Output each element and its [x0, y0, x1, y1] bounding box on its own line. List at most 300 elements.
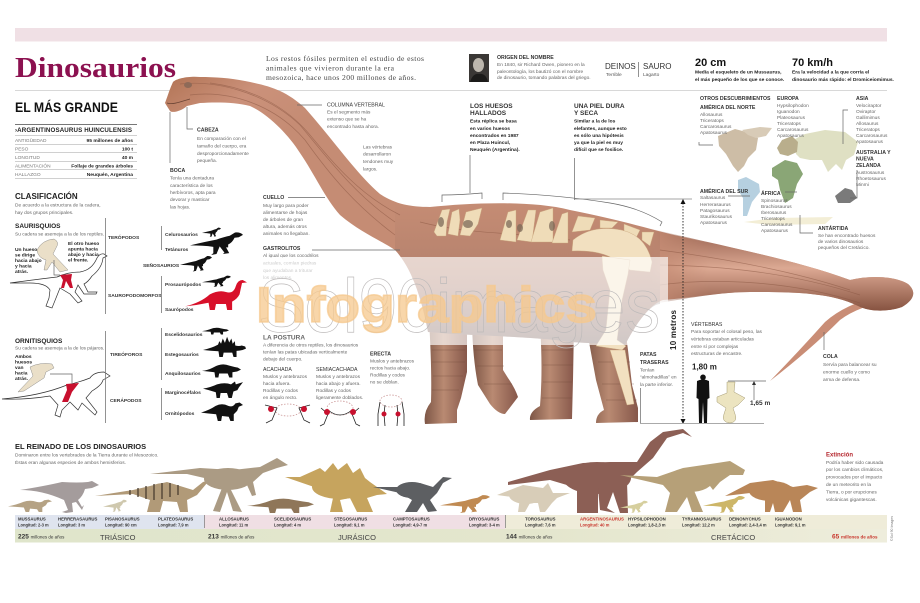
- mouth: [167, 99, 190, 104]
- classification heading: hay dos grupos principales.: [15, 210, 73, 216]
- plateosaurus stripes: [130, 483, 178, 500]
- timeline species strip: Longitud: 9,1 m: [775, 522, 806, 528]
- cabeza note: pequeña.: [197, 158, 217, 164]
- timeline species strip: Longitud: 7,9 m: [158, 522, 189, 528]
- eye: [184, 82, 192, 88]
- skeleton: hip and leg bones: [572, 228, 652, 405]
- cuello note: animales no llegaban.: [263, 231, 310, 237]
- saurischian groups: TERÓPODOS: [108, 233, 140, 241]
- dino: Hypsilophodon: [620, 501, 648, 513]
- tail shading: [640, 226, 913, 311]
- los huesos hallados: Neuquén (Argentina).: [470, 147, 520, 153]
- dino: Iguanodon: [725, 480, 818, 512]
- stat: 70 km/h: dinosaurio más rápido: el Dromiceiomimus.: [792, 77, 895, 83]
- tendons note: Las vértebras: [363, 144, 393, 150]
- dino: Mussaurus: [8, 500, 52, 512]
- patas traseras note: PATAS: [640, 352, 657, 358]
- map: other discoveries: Carcarosaurus: [700, 124, 732, 130]
- boca note: característica de los: [170, 183, 213, 189]
- table: Argentinosaurus data: 100 t: [122, 146, 133, 152]
- map: other discoveries: Iguanodon: [777, 109, 800, 115]
- table: Argentinosaurus data: Neuquén, Argentina: [87, 172, 133, 178]
- columna vertebral note: COLUMNA VERTEBRAL: [327, 102, 385, 108]
- map: other discoveries: Rhoetosaurus: [856, 176, 886, 182]
- saurischian pelvis notes: apunta hacia: [68, 246, 98, 252]
- una piel dura y seca: ya que la piel es muy: [574, 140, 623, 146]
- timeline species strip: Longitud: 2-3 m: [18, 522, 49, 528]
- map: other discoveries: ÁFRICA: [761, 190, 781, 197]
- table: Argentinosaurus data: 40 m: [122, 155, 134, 161]
- timeline species strip: MUSSAURUS: [18, 516, 46, 522]
- ornithischian dino diagram: [2, 363, 110, 417]
- vertebras note: estructuras de encastre.: [691, 351, 742, 357]
- table: Argentinosaurus data: [15, 124, 137, 179]
- intro text: Los restos fósiles permiten el estudio de estos: [266, 54, 424, 63]
- map: other discoveries: Saltasaurus: [700, 195, 726, 201]
- ornithischian groups: CERÁPODOS: [110, 397, 142, 404]
- map: other discoveries: OTROS DESCUBRIMIENTOS: [700, 96, 771, 102]
- cola note: [823, 332, 877, 383]
- map: other discoveries: NUEVA: [856, 156, 874, 162]
- los huesos hallados: [442, 103, 520, 202]
- la postura: Rodillas y codos: [263, 388, 299, 394]
- una piel dura y seca: es sólo una hipótesis: [574, 133, 624, 139]
- la postura: rectos hacia abajo.: [370, 366, 410, 372]
- map: other discoveries: Iberosaurus: [761, 210, 787, 216]
- extinction note: volcánicas gigantescas.: [826, 497, 877, 503]
- una piel dura y seca: Similar a la de los: [574, 118, 616, 124]
- body, neck and tail outline: [165, 77, 913, 345]
- vertebras note: VÉRTEBRAS: [691, 321, 723, 328]
- timeline species strip: DEINONYCHUS: [729, 516, 761, 522]
- dino: Scelidosaurus: [247, 499, 314, 513]
- ornithischian pelvis notes: hacia: [15, 370, 28, 376]
- skin wrinkles: [180, 83, 860, 303]
- classification heading: De acuerdo a la estructura de la cadera,: [15, 202, 101, 208]
- map: other discoveries: Apatosaurus: [700, 220, 728, 226]
- extinction note: por los cambios climáticos,: [826, 467, 883, 473]
- map: Europe: [777, 136, 798, 156]
- saurischian pelvis notes: [15, 241, 99, 275]
- dino: Tyrannosaurus: [620, 461, 745, 512]
- stat: 70 km/h: [792, 57, 895, 83]
- ornithischian silhouettes: [201, 328, 246, 421]
- patas traseras note: TRASERAS: [640, 360, 669, 366]
- gastrolitos note: actuales, comían piedras: [263, 260, 317, 266]
- reign heading: Dominaron entre los vertebrados de la Tierra durante el Mesozoico.: [15, 452, 158, 458]
- etymology: [605, 62, 671, 78]
- map: other discoveries: Spinosaurus: [761, 198, 788, 204]
- human scale: [692, 362, 717, 423]
- map: other discoveries: AMÉRICA DEL NORTE: [700, 103, 756, 111]
- map: other discoveries: Apatosaurus: [700, 130, 728, 136]
- top band: [15, 28, 887, 42]
- una piel dura y seca: elefantes, aunque esto: [574, 126, 627, 132]
- patas traseras note: Tenían: [640, 368, 655, 374]
- map: other discoveries: Triceratops: [856, 127, 880, 133]
- vertebras note: [691, 321, 763, 357]
- extinction note: provocados por el impacto: [826, 474, 883, 480]
- timeline species strip: Longitud: 3-4 m: [469, 522, 500, 528]
- ornithischian pelvis notes: atrás.: [15, 376, 29, 382]
- map: Africa: [772, 160, 803, 203]
- map: other discoveries: AMÉRICA DEL SUR: [700, 187, 748, 195]
- table: Argentinosaurus data: ALIMENTACIÓN: [15, 162, 51, 170]
- etymology: DEINOS: [605, 62, 636, 71]
- map: other discoveries: Austrosaurus: [856, 170, 885, 176]
- cola note: COLA: [823, 354, 838, 360]
- extinction note: Tierra, o por erupciones: [826, 490, 877, 496]
- boca note: BOCA: [170, 168, 186, 174]
- patas traseras note: la parte inferior.: [640, 382, 673, 388]
- gastrolitos note: [263, 246, 400, 281]
- la postura: Muslos y antebrazos: [316, 374, 361, 380]
- boca note: devorar y masticar: [170, 197, 210, 203]
- map: other discoveries: ASIA: [856, 96, 869, 102]
- map: other discoveries: AUSTRALIA Y: [856, 150, 891, 156]
- ornithischian pelvis notes: huesos: [15, 360, 32, 366]
- cuello note: de árboles de gran: [263, 217, 303, 223]
- origin of the name: [497, 55, 591, 81]
- ornithischian groups: Anquilosaurios: [165, 371, 201, 377]
- map: other discoveries: Minmi: [856, 182, 869, 188]
- table: Argentinosaurus data: LONGITUD: [15, 155, 40, 161]
- map: other discoveries: pequeños del Cretácico.: [818, 245, 870, 251]
- timeline species strip: TYRANNOSAURUS: [682, 516, 722, 522]
- table: Argentinosaurus data: 95 millones de años: [87, 138, 133, 144]
- saurischian groups: SAUROPODOMORFOS: [108, 293, 162, 299]
- saurischian pelvis notes: atrás.: [15, 269, 29, 275]
- etymology: SAURO: [643, 62, 671, 71]
- vertebras note: Para soportar el colosal peso, las: [691, 329, 763, 335]
- saurischian silhouettes: [180, 228, 247, 310]
- timeline species strip: HERRERASAURUS: [58, 516, 98, 522]
- la postura: ligeramente doblados.: [316, 395, 363, 401]
- ground line: [640, 423, 764, 424]
- etymology: Lagarto: [643, 72, 660, 78]
- ornithischian pelvis notes: van: [15, 366, 23, 371]
- ornithischian pelvis notes: [15, 354, 32, 382]
- height scale: 10 metros: [575, 199, 692, 424]
- la postura: tenían las patas ubicadas verticalmente: [263, 350, 348, 356]
- tail tip: [770, 292, 895, 381]
- boca note: [170, 112, 216, 210]
- la postura: Rodillas y codos: [316, 388, 352, 394]
- timeline eras strip: CRETÁCICO: [711, 533, 755, 542]
- la postura: SEMIACACHADA: [316, 367, 358, 373]
- dino: Argentinosaurus: [508, 429, 692, 513]
- ornithischian groups: TIREÓFOROS: [110, 350, 143, 358]
- map: other discoveries: Allosaurus: [700, 112, 723, 118]
- cabeza note: CABEZA: [197, 128, 219, 134]
- ornithischian groups: Escelidosaurios: [165, 332, 203, 338]
- la postura: [263, 334, 415, 401]
- dino: Camptosaurus: [373, 477, 452, 512]
- saurischian groups: Prosaurópodos: [165, 282, 201, 288]
- gastrolitos note: GASTROLITOS: [263, 246, 301, 252]
- map: North America: [718, 129, 758, 172]
- origin of the name: En 1840, sir Richard Owen, pionero en la: [497, 62, 585, 68]
- reign heading: EL REINADO DE LOS DINOSAURIOS: [15, 442, 146, 451]
- stat: 20 cm: Medía el esqueleto de un Mussaurus,: [695, 70, 782, 76]
- map: Greenland: [742, 127, 772, 138]
- map: other discoveries: Staurikosaurus: [700, 214, 733, 220]
- map: other discoveries: Gallimimus: [856, 115, 880, 121]
- cola note: Servía para balancear su: [823, 362, 877, 368]
- timeline species strip: IGUANODON: [775, 516, 802, 522]
- body shading: [395, 203, 660, 345]
- cuello note: CUELLO: [263, 195, 284, 201]
- stat: 20 cm: 20 cm: [695, 57, 726, 69]
- main dinosaur: Argentinosaurus: [165, 77, 913, 424]
- cuello note: altura, además otros: [263, 224, 307, 230]
- map: other discoveries: Allosaurus: [856, 121, 879, 127]
- stat: 70 km/h: Era la velocidad a la que corría el: [792, 70, 870, 76]
- timeline species strip: SCELIDOSAURUS: [274, 516, 311, 522]
- intro text: [266, 54, 424, 82]
- timeline species strip: STEGOSAURUS: [334, 516, 367, 522]
- timeline eras strip: 144 millones de años: [506, 534, 553, 540]
- timeline species strip: Longitud: 40 m: [580, 522, 610, 528]
- timeline species strip: Longitud: 90 cm: [105, 522, 137, 528]
- origin of the name: ORIGEN DEL NOMBRE: [497, 55, 554, 61]
- ornithischians heading: Su cadera se asemeja a la de los pájaros.: [15, 346, 104, 352]
- la postura: hacia abajo y afuera.: [316, 381, 361, 387]
- saurischian pelvis notes: y hacia: [15, 264, 32, 270]
- cabeza note: tamaño del cuerpo, era: [197, 144, 247, 150]
- tendons note: [363, 144, 394, 172]
- map: other discoveries: Patagosaurus: [700, 208, 730, 214]
- map: other discoveries: EUROPA: [777, 96, 799, 102]
- saurischian pelvis notes: abajo y hacia: [68, 252, 99, 258]
- los huesos hallados: en varios huesos: [470, 126, 510, 132]
- map: other discoveries: Plateosaurus: [777, 115, 806, 121]
- saurischian groups: SEÑOSAURIOS: [143, 262, 180, 269]
- ornithischian pelvis notes: Ambos: [15, 354, 32, 360]
- map: other discoveries: Triceratops: [777, 121, 801, 127]
- ornithischian groups: Estegosaurios: [165, 352, 199, 358]
- map: other discoveries: Triceratops: [761, 216, 785, 222]
- saurischian pelvis notes: el frente.: [68, 258, 89, 264]
- intro text: mesozoica, hace unos 200 millones de años.: [266, 73, 416, 82]
- origin of the name: de dinosaurio, tomando palabras del griego.: [497, 75, 591, 81]
- extinction note: de un meteorito en la: [826, 482, 871, 488]
- dino: Plateosaurus: [95, 480, 210, 512]
- cuello note: [263, 195, 325, 237]
- ornithischian groups: [105, 328, 203, 423]
- timeline dinosaurs: [8, 429, 818, 513]
- timeline species strip: ALLOSAURUS: [219, 516, 249, 522]
- la postura: Muslos y antebrazos: [370, 358, 415, 364]
- una piel dura y seca: UNA PIEL DURA: [574, 103, 625, 110]
- la postura: Rodillas y codos: [370, 372, 406, 378]
- far hind leg: [530, 325, 574, 420]
- map: other discoveries: Carcarosaurus: [856, 133, 888, 139]
- table: Argentinosaurus data: ANTIGÜEDAD: [15, 137, 47, 144]
- dino: Torosaurus: [497, 483, 570, 512]
- map: other discoveries: Triceratops: [700, 118, 724, 124]
- timeline species strip: Longitud: 9,1 m: [334, 522, 365, 528]
- saurischian groups: Saurópodos: [165, 307, 194, 313]
- posture icon: erect: [378, 395, 404, 426]
- cabeza note: [187, 107, 249, 164]
- los huesos hallados: encontrados en 1987: [470, 133, 519, 139]
- vertebras note: entre sí por complejas: [691, 344, 739, 350]
- timeline species strip: Longitud: 11 m: [219, 522, 248, 528]
- cola note: arma de defensa.: [823, 377, 860, 383]
- boca note: Tenía una dentadura: [170, 176, 214, 182]
- stat: 20 cm: el más pequeño de los que se conoce.: [695, 77, 785, 83]
- map: other discoveries: Hypsilophodon: [777, 103, 809, 109]
- los huesos hallados: LOS HUESOS: [470, 103, 513, 110]
- extinction note: Extinción: [826, 452, 853, 458]
- map: other discoveries: [699, 96, 891, 251]
- la postura: ERECTA: [370, 352, 391, 358]
- la postura: LA POSTURA: [263, 334, 305, 342]
- timeline species strip: Longitud: 12,2 m: [682, 522, 715, 528]
- map: other discoveries: de varios dinosaurios: [818, 239, 864, 245]
- timeline eras strip: TRIÁSICO: [100, 533, 136, 542]
- watermark outline text: Sol90images: [258, 264, 660, 349]
- ornithischians heading: [15, 338, 104, 352]
- dino: Allosaurus: [150, 458, 288, 512]
- map: other discoveries: Oviraptor: [856, 109, 876, 115]
- columna vertebral note: [297, 102, 385, 130]
- timeline eras strip: 65 millones de años: [832, 534, 878, 540]
- white watermark veil: [258, 257, 668, 345]
- extinction note: [826, 452, 884, 503]
- dino: Herrerasaurus: [20, 481, 99, 513]
- ornithischians heading: ORNITISQUIOS: [15, 338, 63, 345]
- los huesos hallados: Esta réplica se basa: [470, 118, 517, 124]
- near front leg: [425, 320, 467, 424]
- map: other discoveries: ANTÁRTIDA: [818, 225, 849, 232]
- map: Australia: [835, 188, 857, 203]
- patas traseras note: [640, 352, 677, 423]
- tendons note: largos.: [363, 166, 377, 172]
- timeline species strip: [15, 515, 887, 529]
- dino: Dryosaurus: [440, 495, 490, 513]
- near hind leg: [585, 320, 638, 423]
- gastrolitos note: Al igual que los cocodrilos: [263, 253, 319, 259]
- columna vertebral note: encontrado hasta ahora.: [327, 124, 379, 130]
- map: other discoveries: Velociraptor: [856, 103, 882, 109]
- ornithischian groups: Marginocéfalos: [165, 390, 201, 396]
- table: Argentinosaurus data: ›ARGENTINOSAURUS HUINCULENSIS: [15, 127, 132, 134]
- dino: Deinonychus: [703, 496, 745, 513]
- reign heading: [15, 442, 158, 466]
- la postura: debajo del cuerpo.: [263, 356, 302, 362]
- cuello note: alimentarse de hojas: [263, 210, 308, 216]
- saurischian pelvis notes: El otro hueso: [68, 241, 99, 247]
- timeline species strip: Longitud: 4,9-7 m: [393, 522, 427, 528]
- timeline species strip: Longitud: 4 m: [274, 522, 301, 528]
- vertebra scale: [717, 381, 770, 423]
- saurischian pelvis notes: se dirige: [15, 252, 35, 258]
- table: Argentinosaurus data: PESO: [15, 146, 29, 152]
- table: Argentinosaurus data: HALLAZGO: [15, 172, 41, 178]
- human scale: 1,80 m: [692, 362, 717, 372]
- timeline species strip: ARGENTINOSAURUS: [580, 516, 624, 522]
- ornithischian groups: Ornitópodos: [165, 411, 195, 417]
- reign heading: Éstas eran algunas especies de ambos hemisferios.: [15, 459, 126, 466]
- map: other discoveries: Brachiosaurus: [761, 204, 792, 210]
- classification heading: [15, 192, 101, 216]
- map: other discoveries: Herrerasaurus: [700, 202, 731, 208]
- map: other discoveries: Se han encontrado huesos: [818, 233, 876, 239]
- table: Argentinosaurus data: Follaje de grandes árboles: [71, 164, 133, 170]
- los huesos hallados: HALLADOS: [470, 110, 507, 117]
- timeline eras strip: 225 millones de años: [18, 534, 65, 540]
- vertebras note: vértebras estaban articuladas: [691, 336, 755, 342]
- tendons note: tendones muy: [363, 159, 394, 165]
- patas traseras note: “almohadillas” en: [640, 374, 677, 380]
- watermark orange text: Infographics: [256, 277, 597, 333]
- una piel dura y seca: Y SECA: [574, 110, 598, 117]
- timeline species strip: PISANOSAURUS: [105, 516, 140, 522]
- etymology: Terrible: [606, 72, 622, 78]
- map: other discoveries: Carcarosaurus: [777, 127, 809, 133]
- tendons note: desarrollaron: [363, 152, 391, 158]
- classification heading: CLASIFICACIÓN: [15, 192, 78, 201]
- columna vertebral note: Es el segmento más: [327, 110, 371, 116]
- timeline species strip: HYPSILOPHODON: [628, 516, 666, 522]
- title: Dinosaurios: [15, 52, 176, 84]
- origin of the name: paleontología, los bautizó con el nombre: [497, 69, 583, 75]
- header divider: [15, 90, 887, 91]
- la postura: hacia afuera.: [263, 381, 291, 387]
- timeline species strip: Longitud: 1,8-2,3 m: [628, 522, 666, 528]
- timeline eras strip: [15, 529, 887, 542]
- la postura: en ángulo recto.: [263, 395, 297, 401]
- map: Eurasia: [793, 130, 858, 172]
- far front leg: [472, 325, 518, 414]
- posture icon: semi-sprawling: [320, 401, 360, 426]
- saurischian dino diagram: [10, 239, 107, 308]
- gastrolitos note: que ayudaban a triturar: [263, 268, 313, 274]
- map: other discoveries: Apatosaurus: [777, 133, 805, 139]
- la postura: Muslos y antebrazos: [263, 374, 308, 380]
- cola note: enorme cuello y como: [823, 370, 870, 376]
- gastrolitos note: los alimentos.: [263, 275, 292, 281]
- los huesos hallados: en Plaza Huincul,: [470, 140, 511, 146]
- boca note: herbívoros, apta para: [170, 190, 216, 196]
- timeline species strip: Longitud: 2,4-3,4 m: [729, 522, 767, 528]
- saurischian pelvis notes: Un hueso: [15, 247, 37, 253]
- stat: 70 km/h: 70 km/h: [792, 57, 833, 69]
- saurischian groups: Tetánuros: [165, 247, 189, 253]
- height scale: 10 metros: 10 metros: [669, 309, 678, 350]
- heading: el más grande: EL MÁS GRANDE: [15, 99, 118, 115]
- posture icon: sprawling: [265, 404, 310, 423]
- la postura: ACACHADA: [263, 367, 292, 373]
- timeline species strip: TOROSAURUS: [525, 516, 556, 522]
- portrait: Richard Owen: [469, 54, 489, 82]
- saurischian pelvis notes: hacia abajo: [15, 258, 42, 264]
- timeline species strip: Longitud: 7,6 m: [525, 522, 556, 528]
- una piel dura y seca: [503, 103, 662, 226]
- la postura: no se doblan.: [370, 380, 399, 386]
- map: South America: [738, 177, 760, 216]
- extinction note: Podría haber sido causada: [826, 460, 884, 466]
- timeline species strip: Longitud: 3 m: [58, 522, 85, 528]
- la postura: A diferencia de otros reptiles, los dinosaurios: [263, 342, 359, 348]
- map: other discoveries: Carcarosaurus: [761, 222, 793, 228]
- intro text: animales que vivieron durante la era: [266, 64, 395, 72]
- dino: Stegosaurus: [285, 463, 387, 512]
- leg wrinkles: [432, 350, 637, 400]
- bone cores: [438, 217, 555, 232]
